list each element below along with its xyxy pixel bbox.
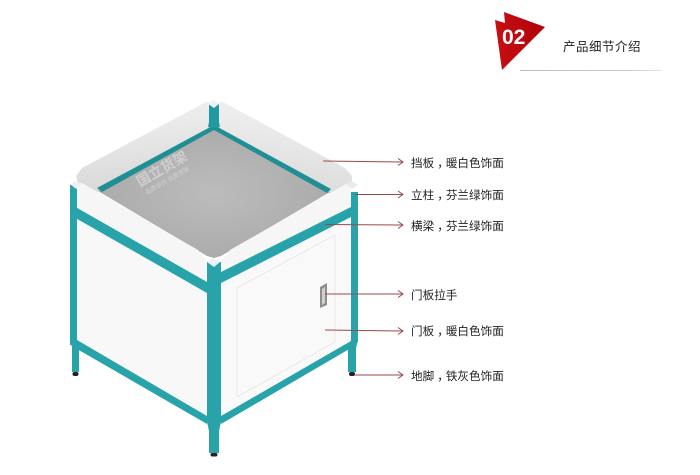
centre foot [210,453,218,456]
callout: door panel [325,324,504,338]
front left wall panel [77,183,207,284]
icon: red triangular badge [495,12,545,70]
callout: baffle [323,156,504,170]
callout: foot [355,369,504,383]
callout: door handle: 门板拉手 [411,288,458,302]
right post [351,192,358,342]
back wall left [76,102,209,192]
left door panel [77,216,207,418]
back wall right [219,102,352,194]
lower left beam [77,340,207,424]
left leg [71,342,79,372]
section header [495,12,662,71]
left foot [72,372,78,376]
callout: foot: 地脚 ，铁灰色饰面 [411,369,504,383]
illustration: cabinet [70,100,358,456]
watermark: 品质设计 优质货架 [144,165,191,196]
callout: post [355,188,504,202]
back rails and post [97,100,331,193]
lower right beam [221,341,351,424]
callout: beam [325,219,504,233]
right corner cap [346,181,358,189]
callout: door handle [325,288,458,302]
left post [70,185,77,345]
right door panel [221,217,351,418]
callout: post: 立柱 ，芬兰绿饰面 [411,188,504,202]
floor panel [98,128,330,258]
watermark: 国立货架 [134,148,190,190]
callout: baffle: 挡板 ，暖白色饰面 [411,156,504,170]
upper left beam [72,205,207,293]
door outline [237,235,335,397]
door handle [320,283,327,308]
badge number: 02 [502,26,525,49]
callout: door panel: 门板 ，暖白色饰面 [411,324,504,338]
callout: beam: 横梁 ，芬兰绿饰面 [411,219,504,233]
front right wall panel [221,184,351,274]
left corner cap [70,181,82,189]
upper right beam [221,207,351,283]
centre post [207,262,221,431]
centre leg [209,430,219,453]
heading: 产品细节介绍 [563,40,641,54]
right leg [348,340,358,372]
front corner cap [207,258,220,267]
right foot [349,372,355,376]
